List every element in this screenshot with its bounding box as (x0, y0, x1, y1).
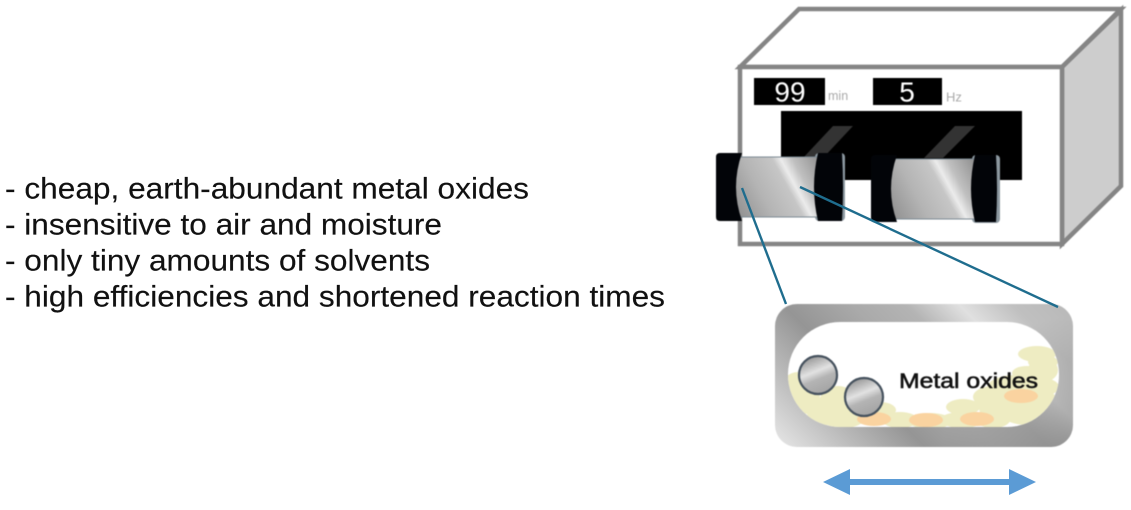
jar cross-section (775, 304, 1073, 447)
jar shell (775, 304, 1073, 447)
black clamp panel (781, 111, 1022, 180)
text block: advantages list (5, 172, 665, 314)
time display: 99 (774, 76, 806, 108)
orange particles (857, 389, 1038, 427)
jar cavity (788, 322, 1059, 427)
milling ball 1 (799, 356, 837, 394)
label: metal oxides: Metal oxides (899, 370, 1038, 393)
right jar (871, 155, 1000, 223)
frequency display (873, 76, 962, 108)
machine side face (1062, 10, 1121, 244)
ball mill machine (716, 9, 1121, 244)
machine front face (740, 67, 1062, 244)
text block: advantages list: - only tiny amounts of solvents (5, 244, 430, 278)
machine top face (740, 9, 1121, 67)
text block: advantages list: - high efficiencies and shortened reaction times (5, 280, 665, 314)
milling ball 2 (845, 378, 883, 416)
frequency display: Hz (946, 90, 962, 104)
slot left (803, 126, 853, 158)
time display: min (828, 89, 848, 103)
slot right (924, 126, 975, 158)
zoom line right (800, 187, 1058, 307)
double-headed arrow (823, 469, 1036, 495)
jar shell shading (775, 304, 1073, 447)
text block: advantages list: - insensitive to air and moisture (5, 208, 442, 242)
text block: advantages list: - cheap, earth-abundant metal oxides (5, 172, 529, 206)
time display (754, 76, 848, 108)
metal oxide powder (784, 346, 1059, 429)
left jar (716, 153, 845, 221)
zoom line left (742, 188, 786, 304)
frequency display: 5 (899, 76, 915, 108)
